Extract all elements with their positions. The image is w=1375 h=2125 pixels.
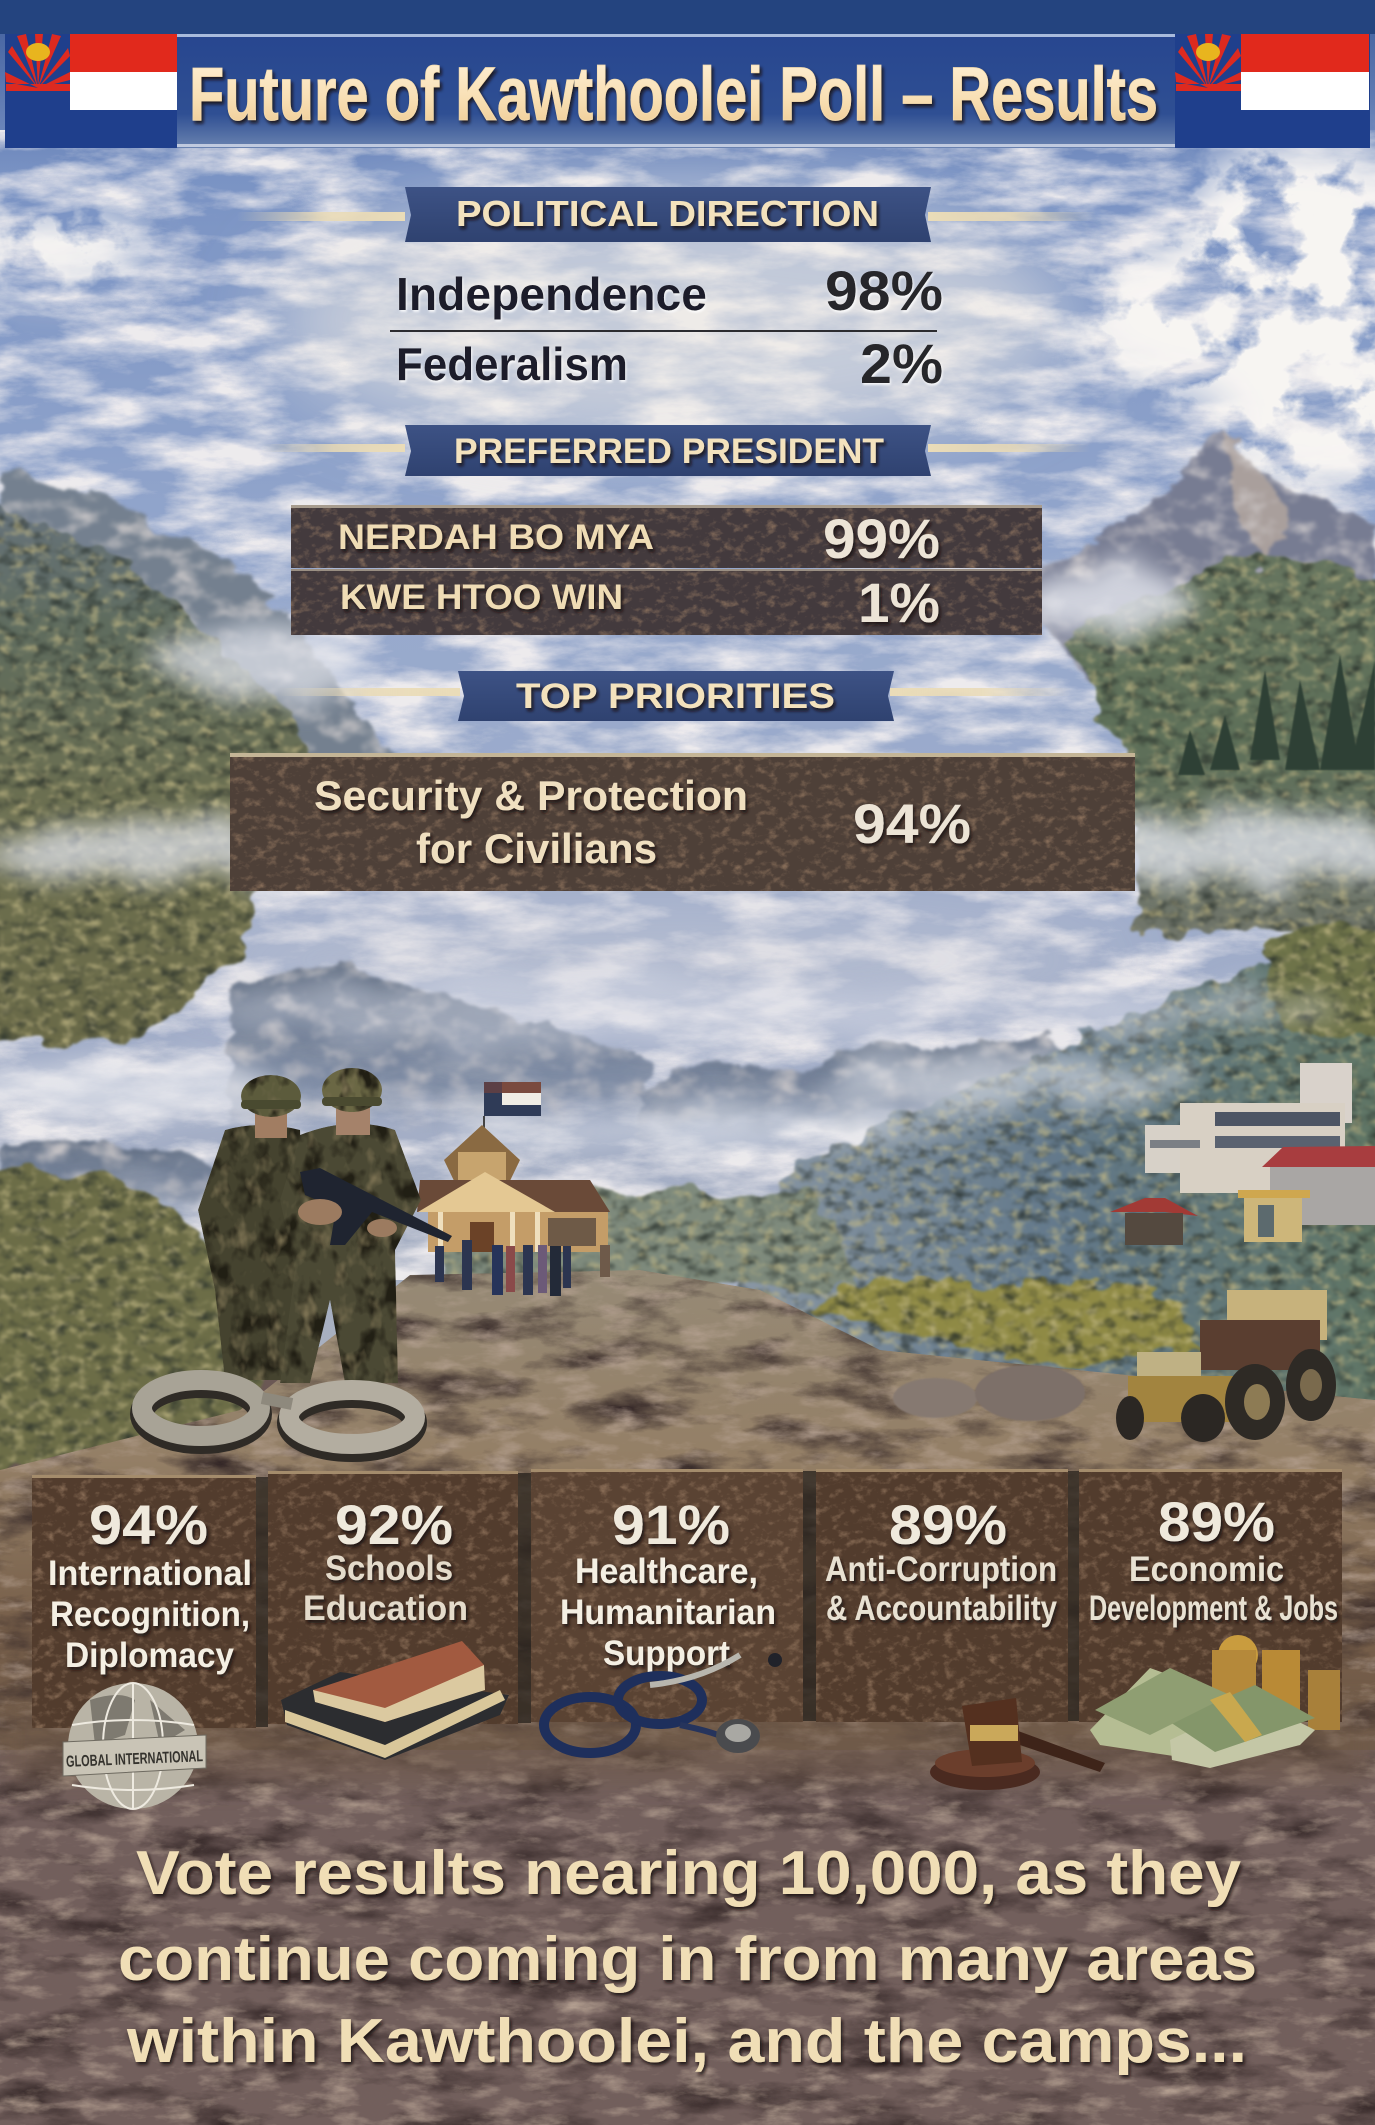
heading: top priorities — [278, 671, 1070, 721]
card: healthcare — [531, 1469, 816, 1722]
card: economic development — [1079, 1469, 1342, 1722]
hospital and buildings — [1110, 1063, 1375, 1245]
aid cart vehicle — [1116, 1290, 1336, 1442]
card: economic development: 89% — [1158, 1490, 1275, 1553]
card: schools education: 92% — [335, 1493, 453, 1556]
voting hall with flag — [417, 1082, 610, 1252]
background: forested hillsides — [0, 490, 1375, 1480]
left soldier — [198, 1075, 305, 1380]
row: independence — [396, 259, 943, 322]
card: international recognition — [32, 1475, 268, 1728]
icon: books — [281, 1641, 509, 1760]
row: federalism: 2% — [860, 332, 943, 395]
broken handcuffs — [142, 1380, 415, 1450]
heading: political direction: POLITICAL DIRECTION — [456, 193, 879, 234]
icon: gavel — [930, 1698, 1105, 1790]
title banner — [0, 0, 1375, 148]
card: anti-corruption: Anti-Corruption — [825, 1550, 1057, 1589]
right soldier — [280, 1068, 452, 1383]
background: road and rocky ground — [0, 1270, 1375, 2125]
card: anti-corruption: & Accountability — [826, 1589, 1057, 1628]
heading: preferred president — [262, 425, 1090, 476]
section: preferred president — [262, 425, 1090, 635]
row: kwe htoo win — [291, 569, 1042, 635]
card: healthcare: Healthcare, — [575, 1552, 758, 1591]
row: federalism: Federalism — [396, 338, 628, 390]
card: international recognition: Recognition, — [50, 1595, 250, 1634]
background: far mountains — [0, 430, 1375, 1220]
row: independence: Independence — [396, 268, 707, 320]
card: international recognition: 94% — [89, 1493, 208, 1556]
section: political direction — [237, 187, 1096, 395]
flag on hall — [483, 1082, 541, 1128]
background: large clouds right — [0, 140, 1375, 490]
background: mist bands — [0, 570, 1375, 1152]
row: independence: 98% — [825, 259, 943, 322]
card: anti-corruption — [816, 1469, 1079, 1722]
row: nerdah bo mya: 99% — [823, 507, 940, 570]
row: federalism — [396, 332, 943, 395]
card: economic development: Economic — [1129, 1550, 1284, 1589]
heading: preferred president: PREFERRED PRESIDENT — [454, 432, 884, 471]
left flag — [5, 34, 177, 148]
card: international recognition: Diplomacy — [65, 1636, 235, 1675]
row: nerdah bo mya — [291, 505, 1042, 570]
heading: top priorities: TOP PRIORITIES — [516, 677, 835, 716]
icon: stethoscope — [544, 1653, 782, 1753]
card: international recognition: International — [48, 1554, 252, 1593]
heading: political direction — [237, 187, 1096, 242]
icon: money and coins — [1090, 1635, 1340, 1768]
top priority slab: Security & Protection — [314, 772, 748, 819]
boulders by road — [893, 1365, 1085, 1421]
card: anti-corruption: 89% — [889, 1493, 1007, 1556]
card: schools education: Education — [303, 1589, 468, 1628]
top priority slab: 94% — [853, 792, 971, 855]
top priority slab — [230, 753, 1135, 891]
row: kwe htoo win: 1% — [858, 571, 940, 634]
voters queue — [435, 1240, 610, 1296]
closing statement — [118, 1839, 1257, 2076]
row: kwe htoo win: KWE HTOO WIN — [340, 578, 623, 617]
background: yellow shrubs — [800, 1280, 1210, 1365]
card: schools education: Schools — [325, 1549, 453, 1588]
card: healthcare: Support — [603, 1634, 730, 1673]
background: sky — [0, 0, 1375, 1350]
soldiers — [198, 1068, 452, 1383]
closing statement: within Kawthoolei, and the camps... — [126, 2007, 1247, 2076]
closing statement: Vote results nearing 10,000, as they — [136, 1839, 1242, 1908]
closing statement: continue coming in from many areas — [118, 1925, 1257, 1994]
rifle — [300, 1168, 452, 1245]
row: nerdah bo mya: NERDAH BO MYA — [338, 518, 654, 557]
right flag — [1175, 34, 1370, 148]
icon: global international globe — [63, 1683, 206, 1809]
card: healthcare: Humanitarian — [560, 1593, 776, 1632]
icon: global international globe: GLOBAL INTERNATIONAL — [66, 1748, 204, 1771]
background: dark pine trees — [1178, 655, 1375, 775]
section: top priorities — [230, 671, 1135, 891]
top priority slab: for Civilians — [416, 825, 657, 872]
card: schools education — [268, 1471, 531, 1724]
card: healthcare: 91% — [612, 1493, 730, 1556]
